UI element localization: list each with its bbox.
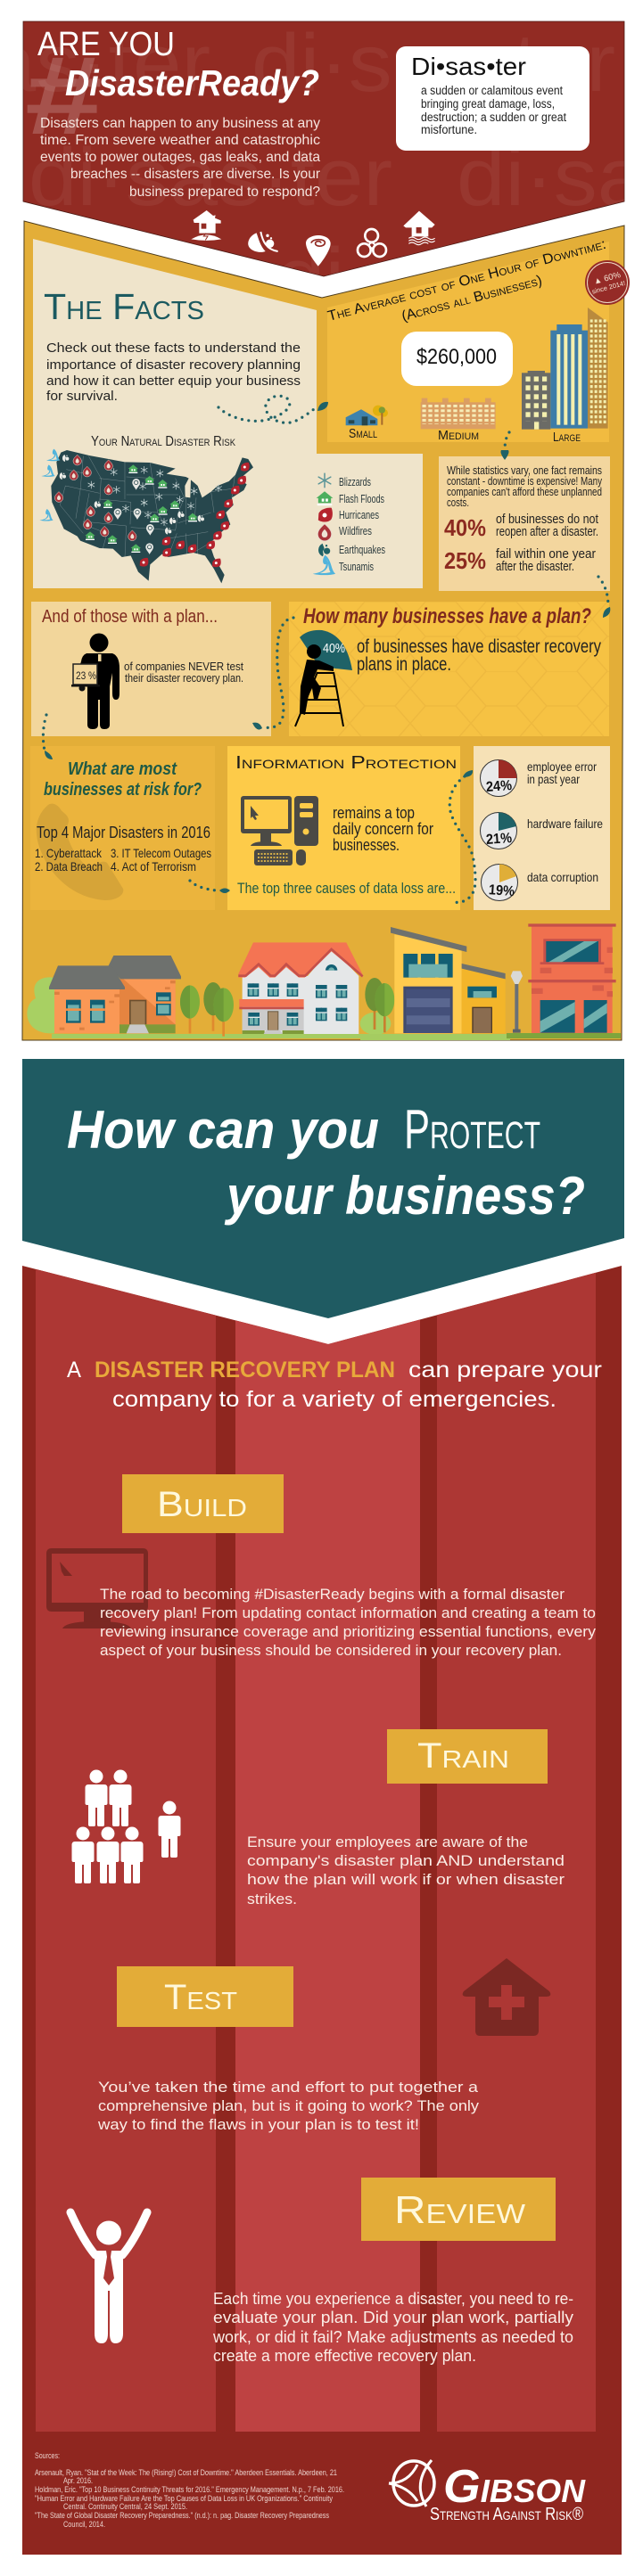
- ground strip segments: [360, 1033, 621, 1040]
- icon: person holding 23% tablet: [71, 633, 120, 729]
- facts intro paragraph: Check out these facts to understand the: [46, 340, 301, 356]
- title: Are You: ARE YOU: [37, 26, 175, 63]
- building: white house: [238, 942, 363, 1034]
- pie: employee error 24%: in past year: [527, 772, 580, 786]
- step: review: Review: [394, 2188, 526, 2232]
- panel: data loss pie charts: [474, 746, 610, 910]
- map legend: Tsunamis: [339, 561, 374, 573]
- panel: downtime statistics: [439, 456, 610, 591]
- statistics paragraph: costs.: [447, 496, 469, 509]
- intro: disaster recovery plan: A: [67, 1358, 81, 1382]
- icon: large buildings: [522, 308, 608, 430]
- stat: 40%: reopen after a disaster.: [496, 525, 598, 539]
- text: top 4 major disasters: 2. Data Breach: [35, 859, 103, 874]
- title: your business?: your business?: [224, 1166, 585, 1226]
- definition card: [396, 46, 589, 151]
- icon: small house: [346, 406, 388, 425]
- icon: tornado: [306, 235, 331, 267]
- step: train: Train: [417, 1736, 509, 1776]
- sources list: "The State of Global Disaster Recovery Preparedness." (n.d.): n. pag. Disaster Recovery Preparedness: [35, 2511, 329, 2521]
- watermark: hash sign: #: [25, 34, 103, 158]
- statistics paragraph: [447, 464, 602, 509]
- pie: data corruption 19%: [482, 865, 598, 900]
- sources list: Sources:: [35, 2451, 60, 2461]
- map legend: Wildfires: [339, 525, 372, 537]
- title: How can you: How can you: [67, 1100, 379, 1160]
- statistics paragraph: While statistics vary, one fact remains: [447, 464, 602, 477]
- title: Protect: Protect: [404, 1099, 540, 1161]
- train paragraph: Ensure your employees are aware of the: [247, 1834, 528, 1850]
- text: of businesses have plans: plans in place.: [357, 654, 451, 675]
- definition card: Di•sas•ter: [411, 53, 526, 80]
- heading: Your Natural Disaster Risk: Your Natural Disaster Risk: [91, 434, 236, 449]
- test paragraph: way to find the flaws in your plan is to test it!: [97, 2116, 419, 2133]
- review paragraph: Each time you experience a disaster, you need to re-: [213, 2290, 573, 2308]
- stat: 40%: [444, 513, 598, 541]
- badge: up 60% since 2014: since 2014!: [591, 279, 626, 296]
- callout: $260,000: [401, 332, 513, 386]
- test paragraph: comprehensive plan, but is it going to work? The only: [98, 2097, 480, 2114]
- text: never test: of companies NEVER test: [124, 660, 243, 673]
- heading: average cost of downtime: (Across all Businesses): [400, 273, 544, 324]
- text: remains a top concern: businesses.: [333, 836, 400, 854]
- text: top 4 major disasters: Top 4 Major Disasters in 2016: [37, 824, 210, 841]
- stat: 25%: after the disaster.: [496, 560, 574, 574]
- intro paragraph: breaches -- disasters are diverse. Is your: [70, 167, 321, 182]
- map legend: Hurricanes: [339, 509, 379, 521]
- review paragraph: create a more effective recovery plan.: [213, 2347, 476, 2365]
- ground strip: [52, 1034, 618, 1038]
- sources list: Central. Continuity Central, 24 Sept. 2015.: [63, 2502, 187, 2512]
- step: review: [70, 2178, 573, 2365]
- train paragraph: how the plan will work if or when disaster: [247, 1871, 565, 1888]
- labels: small, medium, large: Large: [553, 430, 581, 445]
- intro paragraph: [40, 116, 321, 200]
- labels: small, medium, large: Medium: [438, 428, 479, 443]
- review paragraph: evaluate your plan. Did your plan work, partially: [213, 2309, 573, 2326]
- illustration: street of houses: [27, 923, 621, 1040]
- facts intro paragraph: and how it can better equip your business: [46, 373, 301, 389]
- step: build: Build: [157, 1485, 247, 1524]
- panel: how can you protect banner: [22, 1059, 624, 1318]
- icon: 40% fan with person on ladder: [295, 630, 352, 726]
- stat: 40%: 40%: [444, 514, 486, 541]
- stat: 40%: of businesses do not: [496, 513, 598, 527]
- icon: person with raised arms: [70, 2212, 147, 2343]
- sources list: "Human Error and Hardware Failure Are the Top Causes of Data Loss in UK Organizations." Continuity: [35, 2494, 333, 2504]
- icon: desktop computer: [241, 796, 318, 866]
- panel: the facts yellow section: [22, 221, 630, 1040]
- definition card: misfortune.: [421, 123, 477, 136]
- panel: what are most businesses at risk for: [30, 746, 215, 910]
- intro paragraph: Disasters can happen to any business at any: [40, 116, 320, 131]
- trees: middle group: [360, 978, 394, 1035]
- arrows: dotted connectors: [43, 396, 608, 902]
- watermark: di·sas·ter pattern: di·sas·ter: [251, 18, 615, 109]
- intro paragraph: business prepared to respond?: [129, 185, 320, 200]
- test paragraph: [97, 2079, 480, 2133]
- icon: meteor: [248, 232, 278, 252]
- panel: the facts cream block: [33, 239, 423, 588]
- heading: information protection: Information Protection: [235, 753, 457, 773]
- icon: medium building: [421, 398, 496, 429]
- intro paragraph: time. From severe weather and catastrophic: [40, 133, 320, 148]
- sources list: [35, 2451, 344, 2530]
- intro: disaster recovery plan: DISASTER RECOVERY PLAN: [95, 1358, 395, 1382]
- column backgrounds: [36, 1248, 596, 2432]
- pie: hardware failure 21%: hardware failure: [527, 816, 603, 831]
- trees: left group: [180, 982, 234, 1037]
- definition card: destruction; a sudden or great: [421, 111, 566, 124]
- heading: at risk: What are most: [68, 759, 177, 779]
- build paragraph: [100, 1586, 597, 1659]
- emblem: [389, 2460, 434, 2506]
- icon: biohazard: [358, 229, 386, 257]
- definition card: a sudden or calamitous event: [421, 84, 563, 97]
- watermark: di·sas·ter pattern: [23, 32, 624, 275]
- heading: at risk: [44, 759, 202, 800]
- pie: data corruption 19%: 19%: [488, 882, 515, 899]
- watermark: di·sas·ter pattern: di·sas·ter: [276, 232, 640, 323]
- icon: earthquake house: [191, 210, 221, 241]
- badge: up 60% since 2014: [585, 260, 630, 305]
- icons: business sizes: [346, 308, 608, 430]
- icon: faded telephone handset: [37, 804, 123, 900]
- callout: $260,000: $260,000: [416, 345, 497, 369]
- text: of businesses have plans: [357, 636, 601, 675]
- intro: disaster recovery plan: company to for a variety of emergencies.: [112, 1387, 556, 1412]
- text: remains a top concern: remains a top: [333, 804, 415, 822]
- text: never test: [124, 660, 243, 685]
- building: yellow modern house: [391, 927, 506, 1033]
- review paragraph: [212, 2290, 573, 2365]
- build paragraph: reviewing insurance coverage and prioritizing essential functions, every: [100, 1623, 597, 1640]
- icon: team of people: [71, 1770, 180, 1883]
- map legend: Blizzards: [339, 476, 371, 488]
- text: remains a top concern: [333, 804, 433, 854]
- heading: and of those: And of those with a plan...: [42, 607, 218, 627]
- pie: employee error 24%: [480, 759, 597, 797]
- building: orange house: [27, 956, 181, 1033]
- icon: monitor: [46, 1548, 148, 1628]
- intro paragraph: events to power outages, gas leaks, and data: [40, 150, 320, 165]
- icon: 40% fan with person on ladder: 40%: [323, 642, 345, 656]
- build paragraph: The road to becoming #DisasterReady begins with a formal disaster: [100, 1586, 565, 1603]
- stat: 25%: 25%: [444, 547, 486, 574]
- lamp post: [511, 971, 523, 1033]
- build paragraph: aspect of your business should be considered in your recovery plan.: [100, 1642, 562, 1659]
- icon: house with cross: [463, 1958, 550, 2036]
- labels: small, medium, large: Small: [349, 426, 377, 441]
- sources list: Apr. 2016.: [63, 2476, 93, 2486]
- definition card: bringing great damage, loss,: [421, 97, 555, 111]
- panel: recovery plan steps: [22, 1248, 622, 2555]
- stat: 25%: [444, 547, 596, 574]
- facts intro paragraph: [46, 340, 301, 404]
- panel: information protection: [227, 746, 460, 910]
- text: top 4 major disasters: 4. Act of Terrorism: [111, 859, 196, 874]
- facts intro paragraph: importance of disaster recovery planning: [46, 357, 301, 373]
- step: build: [46, 1474, 597, 1659]
- logo: Gibson: Strength Against Risk®: [430, 2505, 583, 2524]
- step: test: [97, 1958, 550, 2133]
- pie: employee error 24%: employee error: [527, 759, 597, 774]
- sources list: Council, 2014.: [63, 2520, 105, 2530]
- map legend: [313, 473, 385, 575]
- map legend: Flash Floods: [339, 493, 384, 505]
- watermark: di·sas·ter pattern: di·sas·ter: [29, 132, 392, 223]
- sources list: Arsenault, Ryan. "Stat of the Week: The (Rising!) Cost of Downtime." Aberdeen Essentials. Aberdeen, 21: [35, 2468, 337, 2478]
- labels: small, medium, large: [349, 426, 581, 445]
- logo: Gibson: [389, 2460, 586, 2524]
- panel: cost of downtime: [326, 237, 630, 445]
- panel: and of those with a plan: [31, 602, 271, 736]
- heading: average cost of downtime: The Average cost of One Hour of Downtime:: [326, 237, 607, 324]
- facts intro paragraph: for survival.: [46, 389, 118, 404]
- review paragraph: work, or did it fail? Make adjustments as needed to: [212, 2328, 573, 2346]
- arrows: leaf arrowheads: [45, 402, 610, 893]
- text: remains a top concern: daily concern for: [333, 820, 433, 838]
- stat: 25%: fail within one year: [496, 547, 596, 562]
- text: never test: their disaster recovery plan.: [125, 671, 243, 685]
- intro: disaster recovery plan: [67, 1358, 602, 1412]
- icon: person holding 23% tablet: 23 %: [76, 671, 96, 682]
- pie: hardware failure 21%: [480, 812, 603, 849]
- pie: hardware failure 21%: 21%: [485, 831, 513, 848]
- icon: flooded house: [403, 211, 435, 245]
- title: DisasterReady?: DisasterReady?: [65, 62, 319, 103]
- train paragraph: strikes.: [247, 1891, 297, 1907]
- build paragraph: recovery plan! From updating contact information and creating a team to: [100, 1604, 596, 1621]
- map: US natural disaster risk: [39, 449, 253, 583]
- intro: disaster recovery plan: can prepare your: [408, 1358, 602, 1382]
- step: train: [71, 1729, 565, 1907]
- pie: data corruption 19%: data corruption: [527, 870, 598, 884]
- text: top three causes: The top three causes of data loss are...: [237, 880, 456, 897]
- sources list: Holdman, Eric. "Top 10 Business Continuity Threats for 2016." Emergency Management. N.p., 7 Feb. 2016.: [35, 2485, 344, 2495]
- panel: header banner: [23, 21, 624, 276]
- pie: employee error 24%: 24%: [485, 778, 513, 795]
- heading: The Facts: The Facts: [44, 286, 204, 327]
- building: red storefront: [528, 923, 616, 1033]
- map legend: Earthquakes: [339, 544, 385, 556]
- train paragraph: company's disaster plan AND understand: [247, 1852, 565, 1869]
- text: top 4 major disasters: 3. IT Telecom Outages: [111, 846, 211, 860]
- step: test: Test: [164, 1978, 237, 2017]
- panel: how many businesses have a plan: [289, 602, 609, 736]
- heading: at risk: businesses at risk for?: [44, 780, 202, 800]
- logo: Gibson: Gibson: [443, 2461, 586, 2513]
- test paragraph: You’ve taken the time and effort to put together a: [98, 2079, 479, 2096]
- badge: up 60% since 2014: ▲ 60%: [592, 270, 622, 287]
- text: top 4 major disasters: [35, 824, 211, 874]
- text: top 4 major disasters: 1. Cyberattack: [35, 846, 103, 860]
- train paragraph: [247, 1834, 565, 1907]
- icons: disaster types: [191, 210, 435, 267]
